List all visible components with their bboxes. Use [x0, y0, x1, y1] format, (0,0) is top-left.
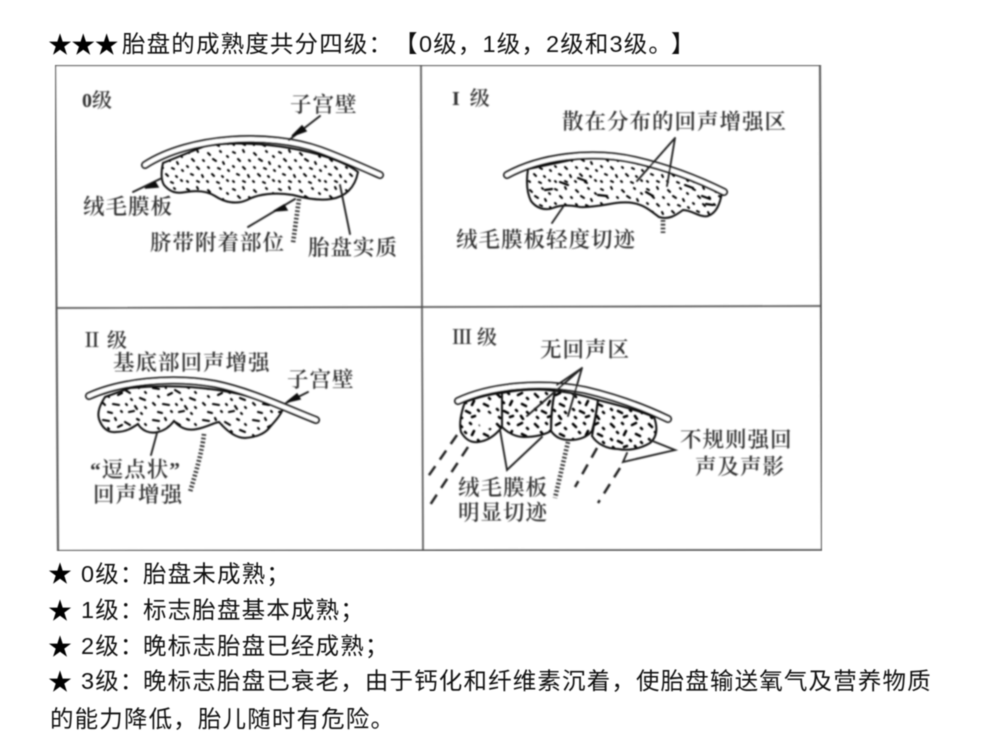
- label: irregular strong echo and shadow: 不规则强回: [680, 428, 793, 452]
- label: comma-like echo enhancement line 2: 回声增强: [93, 483, 184, 507]
- label: uterine wall: 子宫壁: [287, 368, 355, 392]
- label: scattered echo-enhanced areas: 散在分布的回声增强区: [562, 110, 787, 134]
- placenta grade 0 drawing: [133, 116, 380, 243]
- text block: grade 3 description: ★: [48, 662, 72, 697]
- label: placental parenchyma: 胎盘实质: [308, 236, 398, 260]
- placenta grade III drawing: [427, 368, 675, 505]
- panel: grade I: [452, 87, 787, 252]
- text block: grade 3 description: 晚标志胎盘已衰老，由于钙化和纤维素沉着，使胎盘输送氧气及营养物质: [143, 668, 932, 694]
- label: obvious chorionic plate indentation: 绒毛膜板: [458, 476, 548, 500]
- text block: grade 0 description: 胎盘未成熟；: [143, 561, 291, 587]
- label: irregular strong echo and shadow line 2: 声及声影: [695, 455, 785, 479]
- label: comma-like echo enhancement: “逗点状”: [90, 458, 181, 482]
- panel: grade 0: [82, 89, 398, 260]
- label: anechoic areas: 无回声区: [540, 338, 630, 362]
- title: [48, 25, 696, 60]
- text block: grade 3 description: 3级：: [81, 668, 145, 694]
- title: 胎盘的成熟度共分四级：: [122, 31, 393, 57]
- label: basal echo enhancement: 基底部回声增强: [113, 351, 271, 375]
- title: ★: [71, 25, 95, 60]
- label: uterine wall: 子宫壁: [290, 93, 358, 117]
- text block: grade 2 description: 2级：: [81, 633, 145, 659]
- placenta grade II drawing: [89, 380, 316, 492]
- text block: grade 2 description: 晚标志胎盘已经成熟；: [143, 633, 390, 659]
- text block: grade 3 description: [48, 662, 932, 732]
- text block: grade 0 description: ★: [48, 554, 72, 589]
- label: chorionic plate: 绒毛膜板: [83, 195, 173, 219]
- text block: grade 2 description: [48, 627, 390, 662]
- title: ★: [48, 25, 72, 60]
- text block: grade 1 description: 1级：: [81, 597, 145, 623]
- panel: grade II: [82, 329, 355, 507]
- text block: grade 1 description: 标志胎盘基本成熟；: [143, 597, 365, 623]
- text block: grade 2 description: ★: [48, 627, 72, 662]
- diagram frame with four panels: [55, 65, 822, 551]
- text block: grade 3 description: 的能力降低，胎儿随时有危险。: [50, 706, 395, 732]
- title: ★: [95, 25, 119, 60]
- title: 0级，1级，2级和3级。: [419, 31, 673, 57]
- grade III label: Ⅲ 级: [452, 326, 497, 349]
- label: slight chorionic plate indentation: 绒毛膜板轻度切迹: [456, 228, 637, 252]
- text block: grade 1 description: ★: [48, 591, 72, 626]
- label: umbilical cord insertion: 脐带附着部位: [150, 231, 285, 255]
- panel: grade III: [427, 326, 793, 525]
- text block: grade 0 description: 0级：: [81, 561, 145, 587]
- grade I label: I 级: [452, 87, 490, 110]
- placenta grade I drawing: [507, 138, 724, 233]
- label: obvious chorionic plate indentation line 2: 明显切迹: [458, 501, 549, 525]
- text block: grade 0 description: [48, 554, 291, 589]
- text block: grade 1 description: [48, 591, 365, 626]
- title: 】: [671, 31, 696, 57]
- grade II label: Ⅱ 级: [82, 329, 127, 352]
- grade 0 label: 0级: [82, 89, 112, 112]
- title: 【: [394, 31, 419, 57]
